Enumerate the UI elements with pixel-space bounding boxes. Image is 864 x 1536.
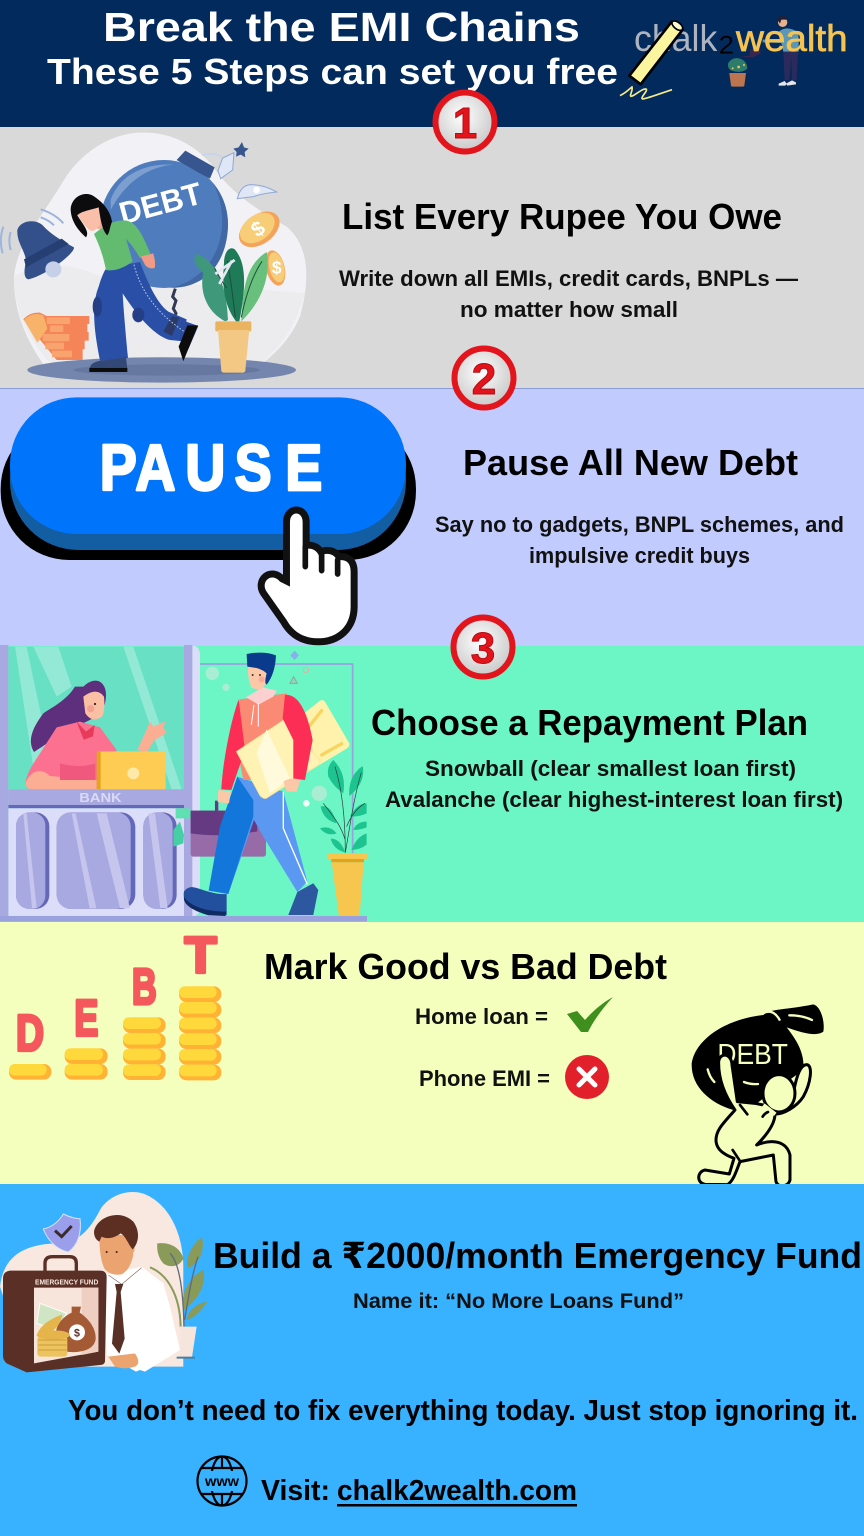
bricks [23,313,89,360]
shoes [184,887,227,915]
text: step 3 description [385,756,843,812]
plant [150,1237,207,1359]
logo: chalk2wealth [620,15,848,99]
icon: green check [567,997,613,1032]
back frame [200,664,353,853]
bank: BANK [79,791,123,805]
debt ball: $ [272,257,282,277]
bank [0,645,200,917]
badge: step 3: 3 [471,624,495,673]
badge: step 2 [454,348,514,408]
trousers [209,777,307,894]
text: step 2 description [435,512,844,568]
badge: step 2: 2 [472,355,496,404]
man [184,653,349,916]
bell [1,209,74,279]
text: step 3 description: Snowball (clear smallest loan first) [425,756,796,781]
logo: chalk2wealth: chalk [634,17,718,59]
briefcase: $ [74,1327,80,1339]
heading: step 2: Pause All New Debt [463,442,798,483]
illustration: debt coin stacks: T [185,927,217,984]
panel: step 4 [0,922,864,1190]
head [248,666,269,690]
shadow [27,357,296,383]
icon: globe www [198,1456,246,1506]
heading: step 5: Build a ₹2000/month Emergency Fund [213,1235,862,1276]
illustration: person carrying debt sack [640,1004,840,1190]
text: step 1 description [339,266,798,322]
link: website: chalk2wealth.com [337,1475,577,1507]
badge: step 1: 1 [453,99,477,148]
panel: step 3 [0,645,864,922]
text: fund name: Name it: “No More Loans Fund” [353,1290,684,1313]
illustration: debt coin stacks: E [74,989,98,1046]
text: phone EMI: Phone EMI = [419,1066,550,1091]
right arm [283,695,313,780]
logo: chalk2wealth: 2 [719,31,734,59]
floor [0,916,367,922]
illustration: bank and man with card [0,645,367,922]
debt ball [100,142,289,321]
plant [195,248,268,373]
subtitle: These 5 Steps can set you free [47,51,618,92]
illustration: debt coin stacks: D [16,1005,44,1062]
button: pause [1,397,416,638]
front card [237,720,320,798]
link: website: Visit: [261,1475,330,1507]
text: step 1 description: no matter how small [460,297,678,322]
plant [320,760,367,916]
bag [191,811,266,857]
illustration: debt coin stacks: B [132,958,157,1015]
coins [232,204,286,255]
woman [71,194,198,372]
text: step 2 description: Say no to gadgets, BNPL schemes, and [435,512,844,537]
back card [300,700,349,777]
briefcase [3,1257,107,1372]
panel: step 1 [0,127,864,388]
title: Break the EMI Chains [103,4,580,50]
heading: step 1: List Every Rupee You Owe [342,196,782,237]
debt ball: $ [247,216,270,242]
badge: step 3 [454,618,512,676]
button: pause: PAUSE [100,431,322,504]
illustration: person carrying debt sack: DEBT [717,1039,788,1071]
icon: hand cursor [265,513,351,638]
logo: chalk2wealth: wealth [735,17,848,59]
heading: step 3: Choose a Repayment Plan [371,702,808,743]
icon: red cross [565,1055,609,1099]
panel: step 2 [0,388,864,646]
bank teller [31,681,106,752]
man [94,1215,180,1372]
panel: header [0,0,864,127]
briefcase: EMERGENCY FUND [35,1277,98,1286]
text: home loan: Home loan = [415,1004,548,1029]
illustration: man with emergency fund case [0,1192,207,1372]
panel: step 5 [0,1184,864,1536]
text: step 2 description: impulsive credit buys [529,543,750,568]
text: DEBT on ball: DEBT [115,176,206,231]
torso [237,693,307,780]
illustration: woman dragging debt ball [1,133,306,383]
badge: step 1 [436,92,494,152]
heading: step 4: Mark Good vs Bad Debt [264,946,667,987]
counter [8,789,184,805]
text: step 3 description: Avalanche (clear highest-interest loan first) [385,787,843,812]
illustration: debt coin stacks [9,927,221,1080]
shield [43,1214,80,1252]
icon: globe www: www [204,1473,239,1489]
text: step 1 description: Write down all EMIs, credit cards, BNPLs — [339,266,798,291]
